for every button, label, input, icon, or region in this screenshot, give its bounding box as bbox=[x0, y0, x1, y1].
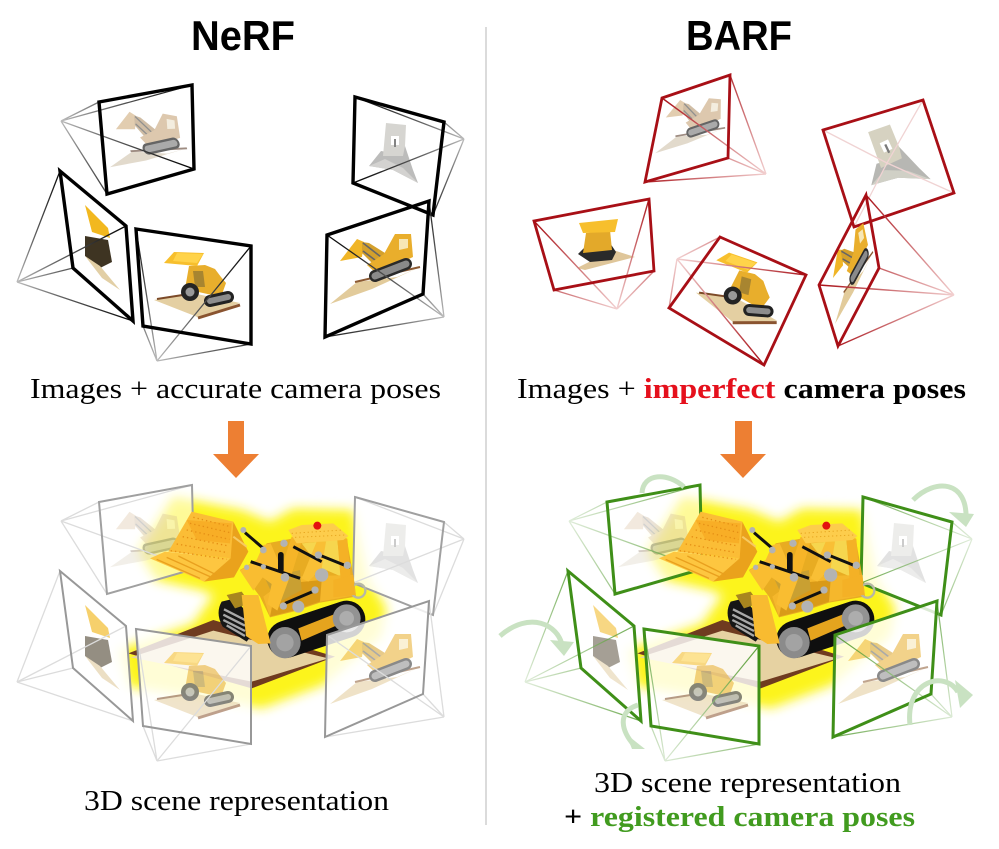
camera: rear-right red frustum bbox=[823, 100, 954, 227]
camera: top-left black frustum bbox=[61, 85, 194, 194]
camera: rear-right grey image frustum bbox=[353, 97, 464, 215]
arrow: top-left camera bbox=[642, 477, 684, 493]
heading: NeRF: NeRF bbox=[191, 12, 295, 59]
arrow: lower-right camera bbox=[910, 680, 973, 725]
camera: front black frustum bbox=[136, 229, 251, 361]
camera: right black frustum bbox=[325, 201, 444, 337]
camera: top-left red frustum bbox=[645, 75, 766, 182]
faded rear cameras bbox=[61, 485, 464, 615]
arrow: top-right camera bbox=[913, 486, 974, 527]
caption: BARF output line one: 3D scene representation bbox=[594, 767, 902, 799]
camera: left black frustum bbox=[17, 171, 133, 321]
camera: front red frustum bbox=[669, 237, 806, 365]
camera: right red frustum bbox=[819, 195, 954, 346]
icons: pale green refinement arrows bbox=[500, 477, 974, 749]
green rear cameras bbox=[569, 485, 972, 615]
glow and baseplate bbox=[118, 497, 387, 708]
bulldozer bbox=[659, 512, 874, 658]
panel: BARF 3D scene bbox=[500, 477, 974, 761]
panel: BARF input cameras bbox=[534, 75, 954, 365]
glow and baseplate bbox=[627, 497, 896, 708]
bulldozer bbox=[150, 512, 365, 658]
panel: NeRF input cameras bbox=[17, 85, 464, 361]
panel: NeRF 3D scene bbox=[17, 485, 464, 761]
faded front cameras bbox=[17, 571, 444, 761]
arrow: lower-left camera bbox=[623, 705, 645, 749]
camera: left red frustum bbox=[534, 199, 654, 309]
arrow: NeRF down bbox=[213, 421, 259, 478]
arrow: BARF down bbox=[720, 421, 766, 478]
center divider bbox=[485, 27, 487, 825]
caption: NeRF output: 3D scene representation bbox=[84, 785, 390, 817]
arrow: left camera bbox=[500, 622, 574, 656]
green front cameras bbox=[525, 571, 952, 761]
heading: BARF: BARF bbox=[686, 12, 792, 59]
caption: NeRF input: Images + accurate camera poses bbox=[30, 373, 441, 405]
caption: BARF output line two: + registered camera poses bbox=[564, 801, 915, 833]
caption: BARF input: Images + imperfect camera poses bbox=[517, 373, 966, 405]
